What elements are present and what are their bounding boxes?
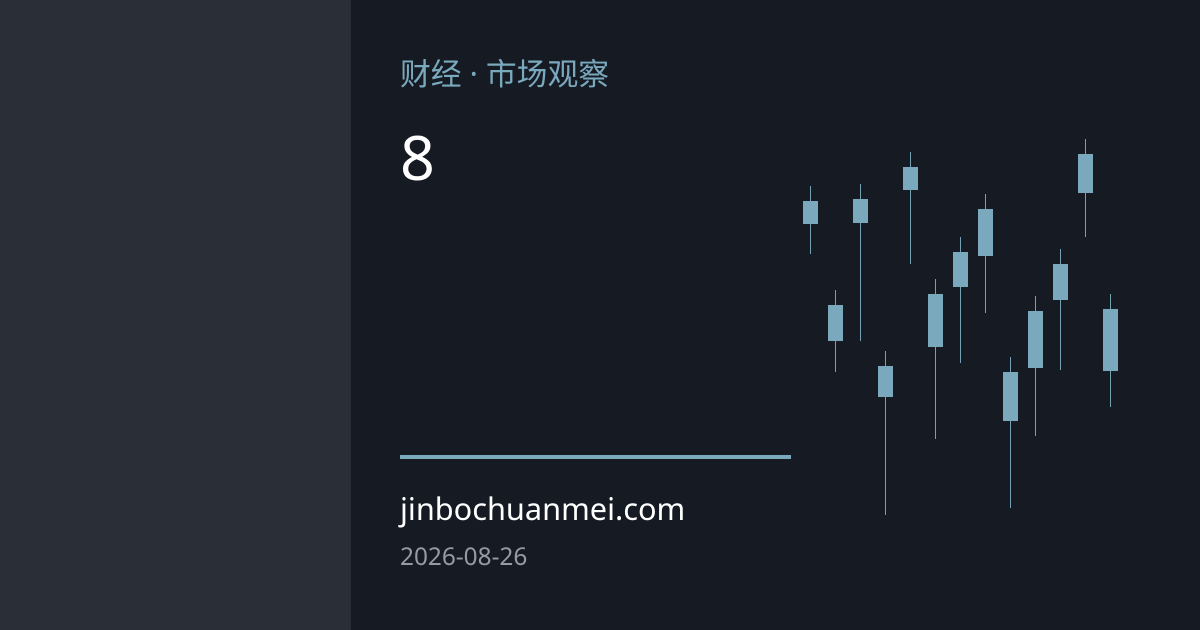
eyebrow heading: 财经 · 市场观察: [400, 53, 609, 95]
panel: left sidebar: [0, 0, 351, 630]
title number: 8: [400, 115, 435, 198]
accent rule: [400, 455, 791, 459]
date: 2026-08-26: [400, 540, 527, 573]
site name: jinbochuanmei.com: [400, 487, 685, 529]
